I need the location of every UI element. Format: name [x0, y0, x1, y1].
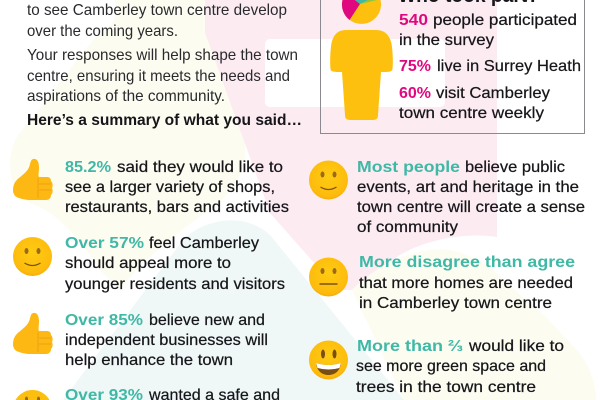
- finding: shops variety: [65, 159, 289, 216]
- icon: smile face cropped: [16, 390, 50, 400]
- intro text: to see Camberley town centre develop: [27, 2, 287, 19]
- finding: younger residents: should appeal more to: [65, 255, 231, 272]
- finding: community events: events, art and heritage in the: [357, 179, 579, 196]
- stat: residents: 75%: [399, 58, 431, 75]
- finding: younger residents: [65, 235, 285, 293]
- finding: independent businesses: help enhance the town: [65, 352, 233, 369]
- finding: shops variety: 85.2%: [65, 159, 111, 176]
- stat: weekly visitors: town centre weekly: [399, 105, 544, 122]
- icon: grinning face: [309, 340, 348, 380]
- panel: who took part: [320, 0, 584, 134]
- finding: green space: would like to: [468, 338, 564, 355]
- finding: more homes: More disagree than agree: [359, 254, 575, 271]
- finding: younger residents: feel Camberley: [149, 235, 259, 252]
- icon: person with pie chart head: [330, 0, 393, 120]
- finding: shops variety: see a larger variety of shops,: [65, 179, 275, 196]
- finding: shops variety: said they would like to: [117, 159, 283, 176]
- finding: safe town: [65, 387, 280, 400]
- stat: weekly visitors: 60%: [399, 85, 431, 102]
- finding: community events: [357, 159, 585, 236]
- finding: green space: trees in the town centre: [356, 379, 536, 396]
- icon: smile face: [13, 237, 52, 276]
- stat: participants: people participated: [433, 12, 577, 29]
- finding: green space: see more green space and: [356, 358, 546, 375]
- intro text: centre, ensuring it meets the needs and: [27, 68, 290, 85]
- finding: green space: More than ⅔: [357, 338, 463, 355]
- finding: green space: [356, 338, 564, 396]
- finding: more homes: in Camberley town centre: [359, 295, 552, 312]
- intro text: over the coming years.: [27, 23, 178, 40]
- finding: independent businesses: Over 85%: [65, 312, 143, 329]
- finding: community events: town centre will create a sense: [357, 199, 585, 216]
- stat: participants: 540: [399, 12, 428, 29]
- finding: community events: Most people: [357, 159, 460, 176]
- finding: independent businesses: [65, 312, 268, 369]
- icon: neutral face: [309, 258, 348, 296]
- finding: independent businesses: believe new and: [149, 312, 265, 329]
- summary heading: Here’s a summary of what you said…: [27, 112, 302, 129]
- finding: community events: believe public: [465, 159, 565, 176]
- icon: thumbs up: [13, 159, 53, 200]
- intro text: [27, 2, 298, 105]
- finding: community events: of community: [357, 219, 458, 236]
- stat: participants: in the survey: [399, 32, 494, 49]
- finding: shops variety: restaurants, bars and activities: [65, 199, 289, 216]
- icon: smile face: [309, 160, 348, 200]
- stat: weekly visitors: visit Camberley: [436, 85, 550, 102]
- stat: participants: [399, 12, 577, 49]
- stat: weekly visitors: [399, 85, 550, 122]
- finding: younger residents: younger residents and visitors: [65, 276, 285, 293]
- finding: more homes: that more homes are needed: [359, 275, 573, 292]
- icon: thumbs up: [13, 313, 53, 354]
- intro text: aspirations of the community.: [27, 88, 225, 105]
- finding: independent businesses: independent businesses will: [65, 332, 268, 349]
- stat: residents: live in Surrey Heath: [437, 58, 581, 75]
- finding: younger residents: Over 57%: [65, 235, 144, 252]
- intro text: Your responses will help shape the town: [27, 47, 298, 64]
- finding: more homes: [359, 254, 575, 312]
